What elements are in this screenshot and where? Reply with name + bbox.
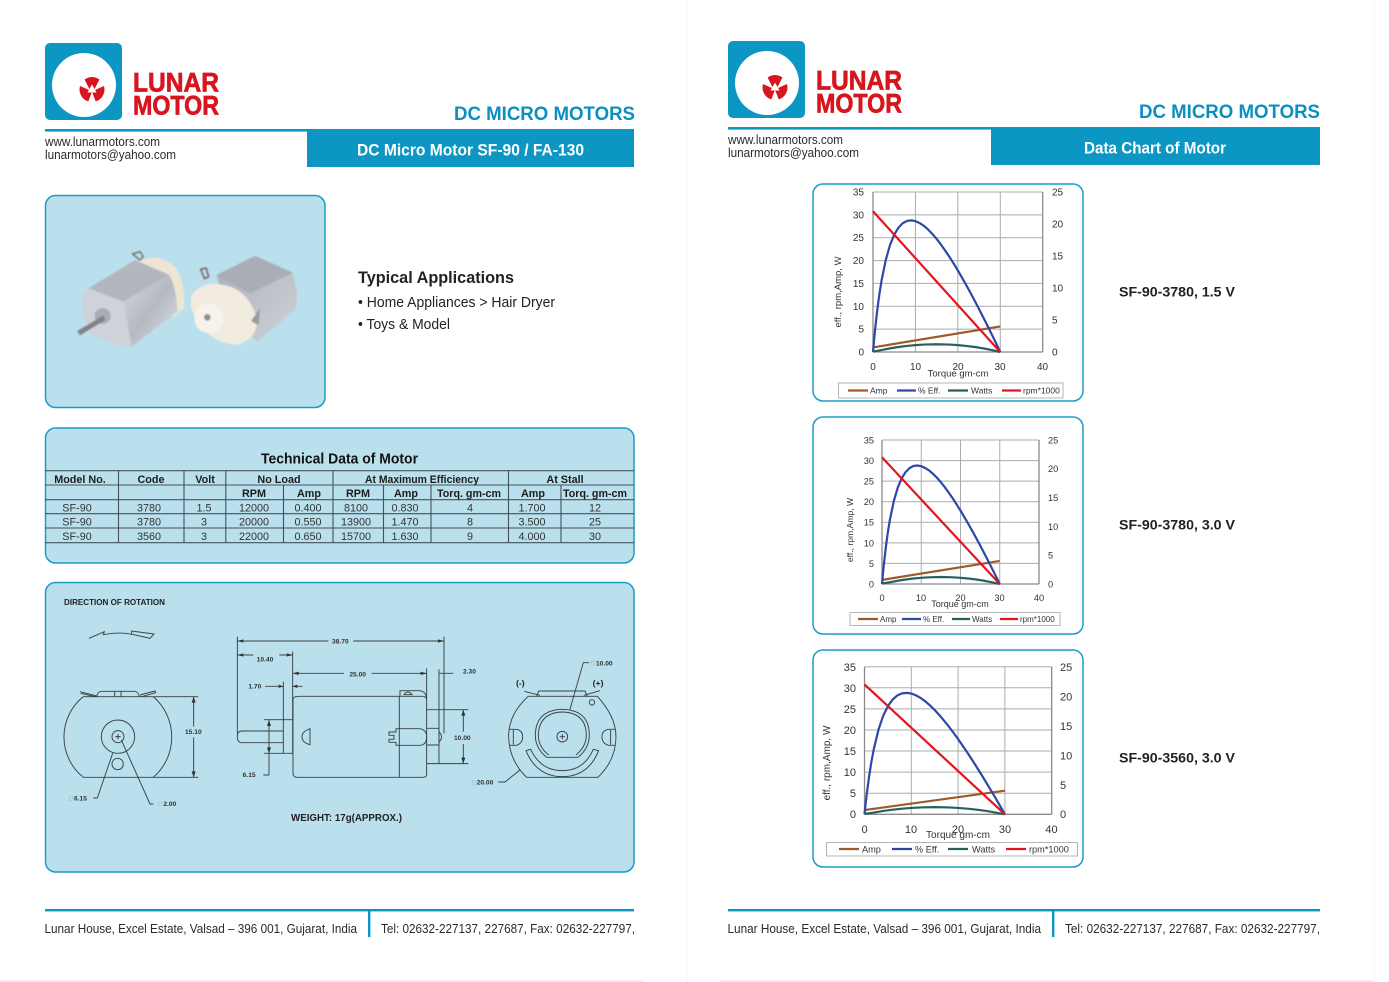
right contact text: www.lunarmotors.com	[727, 132, 843, 147]
drawing: side view with dimensions: 2.30	[463, 669, 476, 676]
table grid and data: SF-90	[62, 502, 92, 514]
table grid and data: Amp	[394, 488, 418, 500]
chart 3 axis labels: 10	[844, 767, 856, 779]
chart 3 axis labels: Torque gm-cm	[926, 830, 990, 841]
drawing: front view with terminals: 10.00	[596, 660, 613, 667]
drawing: side view with dimensions: 38.70	[332, 638, 349, 645]
chart 2 axis labels: 25	[864, 476, 874, 486]
chart 2 axis labels: Torque gm-cm	[931, 599, 989, 609]
chart 3 axis labels: 0	[1060, 809, 1066, 821]
chart 2 axis labels: 40	[1034, 593, 1044, 603]
chart 2 caption: SF-90-3780, 3.0 V	[1119, 518, 1236, 532]
chart 3 axis labels: 20	[844, 725, 856, 737]
left page logo: MOTOR	[133, 90, 219, 120]
chart 3 axis labels: 0	[850, 809, 856, 821]
table grid and data: SF-90	[62, 531, 92, 543]
chart 1 legend: % Eff.	[918, 386, 941, 396]
table grid and data: 0.550	[294, 516, 322, 528]
chart 2 axis labels: 30	[864, 456, 874, 466]
right page logo	[728, 41, 902, 118]
table grid and data: 8	[467, 516, 473, 528]
chart 2 axis labels: 20	[955, 593, 966, 603]
chart 2 axis labels: 35	[864, 436, 874, 446]
table grid and data: 0.400	[294, 502, 322, 514]
table grid and data: 12000	[239, 502, 269, 514]
chart 1 axis labels: 30	[994, 362, 1006, 373]
chart 1 axis labels: 20	[952, 362, 964, 373]
line chart 2 plot	[882, 440, 1039, 584]
chart 2 legend: Watts	[972, 615, 992, 624]
chart 3 axis labels: 30	[999, 824, 1011, 836]
chart 2 axis labels: 30	[994, 593, 1005, 603]
chart 3 axis labels: 25	[844, 704, 856, 716]
left footer: Lunar House, Excel Estate, Valsad – 396 001, Gujarat, India	[44, 922, 357, 936]
chart 2 axis labels: 25	[1048, 436, 1058, 446]
chart 2 axis labels: 20	[1048, 464, 1058, 474]
chart 2 axis labels: 10	[864, 538, 874, 548]
table grid and data: Amp	[297, 488, 321, 500]
chart 2 axis labels: 0	[869, 580, 874, 590]
left footer	[44, 909, 635, 937]
chart 3 axis labels: 0	[861, 824, 868, 836]
chart 1 axis labels: 20	[1052, 220, 1064, 230]
left contact text: www.lunarmotors.com	[44, 134, 160, 149]
chart 1 legend: Watts	[971, 386, 992, 396]
chart 1 axis labels: 5	[858, 324, 864, 336]
chart 1 axis labels	[833, 188, 1064, 380]
chart 1 axis labels: 10	[910, 362, 921, 373]
chart 1 axis labels: 0	[870, 362, 876, 373]
left contact text	[44, 134, 176, 162]
weight note: WEIGHT: 17g(APPROX.)	[291, 813, 402, 824]
chart 3 axis labels: 20	[1060, 692, 1072, 704]
table grid and data: 1.630	[391, 531, 419, 543]
table grid and data: 1.700	[518, 502, 546, 514]
chart 1 axis labels: 15	[1052, 252, 1064, 262]
chart 3 legend: % Eff.	[915, 844, 939, 854]
table grid and data: Torq. gm-cm	[563, 488, 627, 500]
chart 3 legend: Watts	[972, 844, 996, 854]
chart 3 axis labels: 20	[952, 824, 964, 836]
right page logo: MOTOR	[816, 88, 902, 118]
chart 3 legend: rpm*1000	[1029, 844, 1069, 854]
chart 3 axis labels: 40	[1045, 824, 1058, 836]
table grid and data	[45, 471, 634, 543]
table grid and data: 0.830	[391, 502, 419, 514]
table grid and data: 1.470	[391, 516, 419, 528]
chart 2 axis labels: 15	[1048, 493, 1058, 503]
right contact text	[727, 132, 859, 160]
chart 1 axis labels: 0	[1052, 348, 1058, 358]
chart 2 legend: % Eff.	[923, 615, 944, 624]
chart 1 legend	[838, 383, 1063, 398]
chart 1 axis labels: 20	[853, 256, 864, 267]
drawing: rear view with rotation arrow	[64, 631, 202, 808]
right footer: Tel: 02632-227137, 227687, Fax: 02632-227797,	[1065, 922, 1320, 936]
chart 2 axis labels: eff., rpm,Amp, W	[845, 497, 855, 562]
direction of rotation label: DIRECTION OF ROTATION	[64, 597, 165, 607]
drawing: rear view with rotation arrow: 2.00	[163, 801, 177, 808]
chart 1 legend: rpm*1000	[1023, 386, 1060, 396]
chart 3 axis labels: 10	[905, 824, 917, 836]
table grid and data: 3	[201, 531, 207, 543]
left page logo: LUNAR	[133, 68, 219, 98]
table grid and data: 3560	[137, 531, 161, 543]
text block: typical applications: Typical Applications	[358, 269, 514, 287]
chart 1 axis labels: 30	[853, 210, 864, 222]
chart 3 axis labels: 25	[1060, 662, 1072, 674]
drawing: front view with terminals: 20.00	[477, 780, 494, 787]
right footer	[728, 909, 1320, 937]
table grid and data: RPM	[346, 488, 370, 500]
table grid and data: 4.000	[518, 531, 546, 543]
icon: red rotor emblem right	[762, 75, 788, 100]
left header band: DC Micro Motor SF-90 / FA-130	[357, 142, 584, 160]
drawing: front view with terminals: (-)	[516, 678, 525, 688]
drawing: front view with terminals: (+)	[593, 678, 604, 688]
right heading: DC MICRO MOTORS: DC MICRO MOTORS	[1139, 102, 1320, 123]
chart 3 axis labels: 5	[1060, 780, 1066, 792]
drawing: side view with dimensions: 10.00	[454, 735, 471, 742]
chart 3 axis labels: 35	[844, 662, 856, 674]
drawing: side view with dimensions	[237, 637, 476, 779]
line chart 3 plot	[864, 667, 1052, 814]
chart 1 axis labels: 0	[858, 348, 864, 358]
chart 3 axis labels: 5	[850, 788, 856, 800]
chart 1 axis labels: Torque gm-cm	[928, 368, 988, 380]
chart 2 axis labels: 0	[1048, 580, 1053, 590]
drawing: side view with dimensions: 6.15	[243, 772, 256, 779]
chart 3 axis labels	[822, 662, 1072, 841]
chart 2 legend: rpm*1000	[1020, 615, 1055, 624]
chart 3 axis labels: 10	[1060, 750, 1072, 762]
table grid and data: Torq. gm-cm	[437, 488, 501, 500]
chart 3 axis labels: eff., rpm,Amp, W	[822, 725, 833, 800]
table grid and data: 15700	[341, 531, 371, 543]
chart 2 legend	[850, 612, 1060, 626]
chart 1 axis labels: 35	[853, 188, 864, 198]
chart 1 axis labels: 5	[1052, 316, 1058, 326]
right header band: Data Chart of Motor	[1084, 140, 1227, 158]
table grid and data: Volt	[195, 474, 215, 486]
table grid and data: SF-90	[62, 516, 92, 528]
chart 1 axis labels: 40	[1037, 362, 1048, 373]
table grid and data: 0.650	[294, 531, 322, 543]
left footer: Tel: 02632-227137, 227687, Fax: 02632-227797,	[381, 922, 635, 936]
right footer: Lunar House, Excel Estate, Valsad – 396 001, Gujarat, India	[728, 922, 1041, 936]
chart 2 legend: Amp	[880, 615, 897, 624]
chart 2 axis labels: 5	[869, 559, 874, 569]
table grid and data: Amp	[521, 488, 545, 500]
chart 2 axis labels: 20	[864, 497, 874, 507]
chart 2 axis labels	[845, 436, 1058, 609]
panel: chart SF-90-3560 3.0 V	[813, 650, 1083, 867]
left contact text: lunarmotors@yahoo.com	[45, 147, 176, 162]
text block: typical applications	[358, 269, 555, 333]
chart 3 legend: Amp	[862, 844, 881, 854]
table heading: Technical Data of Motor	[261, 452, 418, 468]
right header band	[728, 127, 1320, 165]
table grid and data: 13900	[341, 516, 371, 528]
table grid and data: Model No.	[54, 474, 106, 486]
chart 3 axis labels: 15	[844, 746, 856, 758]
chart 3 caption: SF-90-3560, 3.0 V	[1119, 750, 1236, 766]
right page logo: LUNAR	[816, 66, 902, 96]
chart 1 axis labels: 25	[853, 233, 864, 244]
chart 2 axis labels: 0	[879, 593, 885, 603]
table grid and data: 12	[589, 502, 601, 514]
table grid and data: 3.500	[518, 516, 546, 528]
text block: typical applications: • Home Appliances > Hair Dryer	[358, 295, 555, 311]
right contact text: lunarmotors@yahoo.com	[728, 145, 859, 160]
chart 3 axis labels: 30	[844, 683, 856, 695]
left heading: DC MICRO MOTORS: DC MICRO MOTORS	[454, 104, 635, 125]
panel: dimensional drawings	[46, 582, 634, 872]
chart 1 axis labels: 15	[853, 279, 864, 290]
icon: red rotor emblem	[79, 77, 105, 102]
drawing: front view with terminals	[472, 660, 616, 787]
chart 1 caption: SF-90-3780, 1.5 V	[1119, 284, 1236, 300]
panel: chart SF-90-3780 1.5 V	[813, 184, 1083, 401]
chart 3 axis labels: 15	[1060, 721, 1072, 733]
chart 2 axis labels: 10	[1048, 522, 1058, 532]
chart 2 axis labels: 15	[864, 518, 874, 528]
table grid and data: 25	[589, 516, 601, 528]
panel: motor photo	[46, 196, 325, 408]
drawing: rear view with rotation arrow: 15.10	[185, 729, 202, 736]
table grid and data: 22000	[239, 531, 269, 543]
chart 2 axis labels: 5	[1048, 550, 1053, 560]
table grid and data: At Maximum Efficiency	[365, 474, 479, 486]
table grid and data: 30	[589, 531, 601, 543]
table grid and data: 20000	[239, 516, 269, 528]
chart 3 legend	[826, 842, 1078, 856]
chart 1 axis labels: 10	[853, 302, 864, 313]
text block: typical applications: • Toys & Model	[358, 317, 450, 333]
panel: chart SF-90-3780 3.0 V	[813, 417, 1083, 634]
line chart 1 plot	[873, 192, 1043, 352]
table grid and data: At Stall	[546, 474, 584, 486]
table grid and data: 3780	[137, 516, 161, 528]
chart 1 axis labels: eff., rpm,Amp, W	[833, 256, 844, 328]
table grid and data: No Load	[257, 474, 301, 486]
table grid and data: 1.5	[196, 502, 212, 514]
chart 1 axis labels: 25	[1052, 188, 1064, 198]
chart 1 axis labels: 10	[1052, 284, 1064, 294]
table grid and data: 3	[201, 516, 207, 528]
table grid and data: 3780	[137, 502, 161, 514]
panel: technical data table	[45, 428, 634, 563]
table grid and data: RPM	[242, 488, 266, 500]
table grid and data: Code	[138, 474, 164, 486]
drawing: side view with dimensions: 25.00	[349, 671, 366, 678]
table grid and data: 9	[467, 531, 473, 543]
chart 2 axis labels: 10	[916, 593, 926, 603]
icon: motor photographs	[77, 252, 297, 347]
table grid and data: 4	[467, 502, 473, 514]
drawing: side view with dimensions: 1.70	[248, 684, 262, 691]
table grid and data: 8100	[344, 502, 368, 514]
left header band	[45, 129, 634, 167]
drawing: rear view with rotation arrow: 6.15	[74, 796, 87, 803]
drawing: side view with dimensions: 10.40	[257, 656, 274, 663]
left page logo	[45, 43, 219, 120]
chart 1 legend: Amp	[870, 386, 888, 396]
